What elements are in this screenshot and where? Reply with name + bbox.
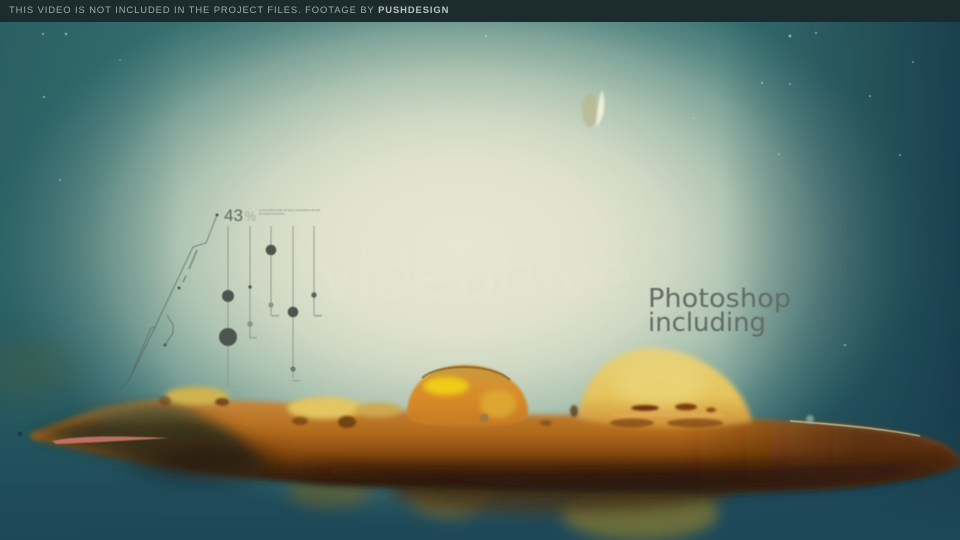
stat: 43%: 43 (224, 207, 243, 225)
spot at far left (18, 432, 22, 436)
reflection below body (288, 470, 730, 540)
caption: Photoshop including: including (648, 308, 766, 338)
mound pits (159, 396, 356, 428)
column 2 (247, 226, 257, 338)
oil body (18, 348, 960, 540)
column 1 (219, 226, 237, 388)
large dome (578, 348, 752, 428)
glass droplet (407, 365, 528, 426)
connector circuit lines (110, 215, 217, 403)
column 5 (311, 226, 322, 316)
connector nodes (164, 214, 218, 346)
top notice bar: THIS VIDEO IS NOT INCLUDED IN THE PROJECT FILES. FOOTAGE BY PUSHDESIGN (9, 4, 449, 15)
dark under shadow right (300, 460, 950, 492)
stat: 43%: % (245, 208, 256, 224)
dark left taper (32, 408, 272, 476)
olive upper left (80, 404, 200, 420)
stat: 43%: do eiusmod tempor (259, 212, 285, 216)
stat: 43% (224, 207, 320, 225)
column 3 (266, 226, 279, 316)
pink rim left (52, 436, 170, 444)
light rim right (790, 421, 920, 436)
watermark: videohive (318, 238, 634, 312)
main amber lens (30, 400, 960, 493)
chart: vertical pin lines (110, 214, 322, 403)
floating seed (582, 90, 604, 127)
dome pits (540, 404, 724, 428)
caption: Photoshop including (648, 284, 791, 338)
column 4 (288, 226, 300, 382)
small droplet on rim (806, 415, 814, 423)
floating particles (42, 32, 914, 346)
black core left (135, 451, 275, 469)
stat: 43%: Lorem ipsum dolor sit amet consectetur elit sed (259, 208, 320, 212)
left yellow mound (165, 387, 229, 405)
middle yellow mound (287, 397, 363, 419)
caption: Photoshop including: Photoshop (648, 284, 791, 314)
top notice bar (0, 0, 960, 22)
brown tint, right part of body (680, 418, 960, 492)
